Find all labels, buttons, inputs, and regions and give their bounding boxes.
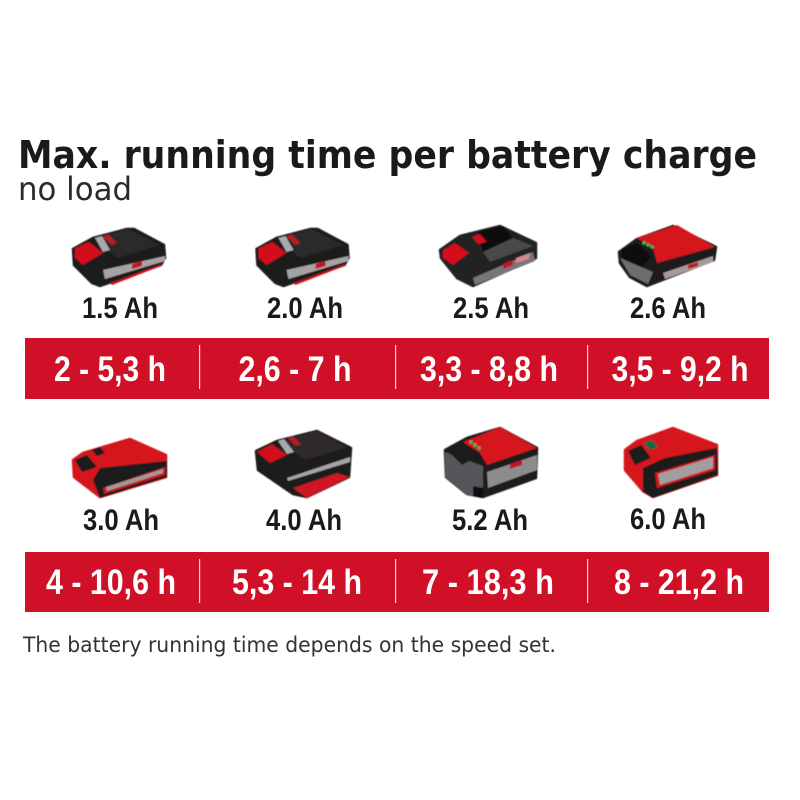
labels row 2: 3.0 Ah bbox=[83, 504, 159, 537]
labels row 1 bbox=[82, 292, 706, 325]
labels row 1: 2.6 Ah bbox=[630, 292, 706, 325]
labels row 2 bbox=[83, 503, 706, 537]
subtitle: no load bbox=[18, 170, 132, 208]
labels row 2: 5.2 Ah bbox=[452, 504, 528, 537]
red bar row 1: 2 - 5,3 h bbox=[54, 350, 166, 389]
battery: 4.0 Ah bbox=[256, 431, 351, 498]
labels row 1: 2.5 Ah bbox=[453, 292, 529, 325]
battery: 2.6 Ah bbox=[619, 225, 716, 286]
labels row 1: 2.0 Ah bbox=[267, 292, 343, 325]
battery: 2.0 Ah bbox=[256, 229, 348, 286]
red bar row 2 bbox=[25, 552, 769, 612]
battery: 2.5 Ah bbox=[440, 226, 536, 286]
red bar row 1: 3,5 - 9,2 h bbox=[612, 350, 748, 389]
battery: 1.5 Ah bbox=[73, 229, 165, 286]
footnote: The battery running time depends on the speed set. bbox=[22, 633, 556, 657]
red bar row 2: 7 - 18,3 h bbox=[422, 563, 554, 602]
red bar row 1: 3,3 - 8,8 h bbox=[420, 350, 558, 389]
red bar row 1 bbox=[25, 338, 769, 399]
red bar row 2: 5,3 - 14 h bbox=[232, 563, 362, 602]
battery: 6.0 Ah bbox=[625, 428, 718, 498]
red bar row 2: 4 - 10,6 h bbox=[46, 563, 176, 602]
labels row 1: 1.5 Ah bbox=[82, 292, 158, 325]
battery: 5.2 Ah bbox=[445, 427, 537, 498]
labels row 2: 4.0 Ah bbox=[266, 504, 342, 537]
labels row 2: 6.0 Ah bbox=[630, 503, 706, 536]
red bar row 2: 8 - 21,2 h bbox=[614, 563, 744, 602]
red bar row 1: 2,6 - 7 h bbox=[238, 350, 352, 389]
battery: 3.0 Ah bbox=[73, 439, 167, 498]
